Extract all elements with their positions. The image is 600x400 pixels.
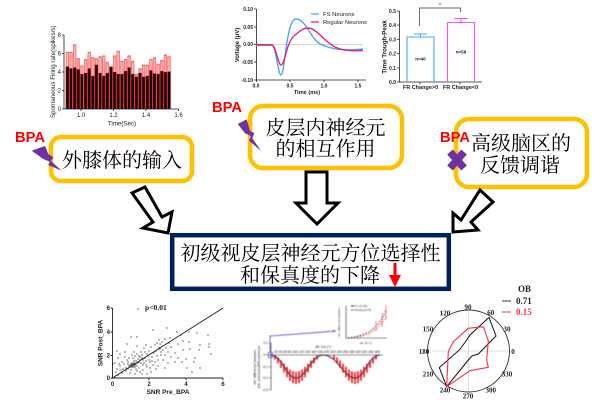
bar chart: spontaneous firing rate: 1.6 [174, 113, 183, 119]
inset chart: small orientation range: Pre/post FR [355, 308, 372, 312]
panel: intracortical interaction box [250, 106, 402, 168]
label: BPA right: BPA [440, 129, 470, 146]
inset chart: small orientation range: P (<0.05) [355, 304, 367, 308]
bar chart: time trough-peak: 0.4 [389, 23, 396, 29]
bar chart: time trough-peak: FR Change<0 [443, 85, 478, 91]
panel: intracortical interaction box: 皮层内神经元 [266, 116, 386, 140]
line chart: FS and regular neuron waveforms: Time (ms) [294, 90, 320, 96]
scatter plot: SNR pre vs post BPA: 6 [107, 306, 111, 312]
polar plot: orientation tuning: 90 [464, 304, 472, 312]
line chart: orientation difference with inset [253, 304, 387, 392]
line chart: orientation difference with inset: Ori. difference between [253, 349, 257, 384]
bar chart: spontaneous firing rate: 1.4 [142, 113, 151, 119]
label: BPA left: BPA [15, 129, 45, 146]
bar chart: time trough-peak: n=40 [415, 56, 426, 62]
scatter plot: SNR pre vs post BPA [98, 303, 225, 396]
scatter plot: SNR pre vs post BPA: SNR Post_BPA [98, 319, 104, 366]
legend: neuron types: FS Neurons [323, 12, 354, 18]
label: BPA center: BPA [212, 99, 242, 116]
bar chart: spontaneous firing rate: 1.2 [109, 113, 118, 119]
polar plot: orientation tuning: 120 [440, 310, 451, 318]
scatter plot: SNR pre vs post BPA: SNR Pre_BPA [147, 389, 190, 396]
inset chart: small orientation range: Ori. difference between [337, 307, 341, 336]
bar chart: spontaneous firing rate: Spontaneous Firing rate(spikes/s) [50, 25, 57, 118]
panel: intracortical interaction box: 的相互作用 [276, 138, 376, 160]
line chart: FS and regular neuron waveforms: -0.05 [242, 60, 253, 66]
icon: red down arrow [389, 263, 401, 287]
line chart: FS and regular neuron waveforms: 0.10 [243, 7, 253, 13]
inset chart: small orientation range [337, 304, 387, 345]
bar chart: time trough-peak: 0.2 [389, 52, 396, 58]
line chart: FS and regular neuron waveforms: 0.5 [287, 84, 294, 90]
bar chart: spontaneous firing rate: 1.0 [77, 113, 86, 119]
bar chart: time trough-peak: Time Trough-Peak [382, 20, 388, 74]
bar chart: spontaneous firing rate: 4 [58, 70, 62, 76]
scatter plot: SNR pre vs post BPA: 4 [107, 330, 111, 336]
polar plot: orientation tuning: 300 [485, 386, 496, 394]
line chart: orientation difference with inset: 20 40 60 80 100 120 140 160 180 200 220 240 260 280 300 320 340 360 [274, 350, 380, 354]
line chart: FS and regular neuron waveforms: -0.10 [242, 78, 253, 84]
line chart: orientation difference with inset: 0.0 [263, 353, 268, 357]
legend: neuron types [311, 12, 367, 26]
bar chart: time trough-peak: 0.3 [389, 38, 396, 44]
bar chart: time trough-peak: * [439, 3, 442, 9]
line chart: orientation difference with inset: -0.1 [262, 365, 268, 369]
bar chart: time trough-peak: n=58 [456, 50, 467, 54]
line chart: FS and regular neuron waveforms: 1.5 [355, 84, 362, 90]
polar plot: orientation tuning: 240 [440, 386, 451, 394]
polar plot: orientation tuning: 180 [419, 348, 430, 356]
bar chart: spontaneous firing rate: Time(Sec) [108, 120, 136, 128]
polar plot: orientation tuning: 30 [504, 326, 511, 334]
scatter plot: SNR pre vs post BPA: 6 [221, 382, 225, 388]
panel: LGN input box: 外膝体的输入 [62, 149, 182, 172]
polar plot: orientation tuning: 0 [511, 348, 515, 356]
legend: neuron types: Regular Neurons [323, 20, 367, 26]
line chart: orientation difference with inset: dK On (°) [315, 345, 332, 349]
line chart: FS and regular neuron waveforms: 1.0 [321, 84, 328, 90]
line chart: FS and regular neuron waveforms: Voltage (μV) [235, 28, 241, 62]
legend: OB values [502, 284, 532, 317]
bar chart: time trough-peak: 0.5 [389, 9, 396, 15]
panel: higher area feedback box: 反馈调谐 [480, 154, 560, 177]
polar plot: orientation tuning: 60 [487, 309, 495, 317]
bar chart: time trough-peak: 0.0 [389, 80, 396, 86]
scatter plot: SNR pre vs post BPA: 0 [111, 382, 115, 388]
line chart: orientation difference with inset: -0.3 [262, 388, 268, 392]
arrow: center box to result [296, 172, 338, 224]
legend: OB values: OB [518, 284, 531, 294]
callout: blue connector to inset [268, 330, 336, 358]
scatter plot: SNR pre vs post BPA: p<0.01 [145, 303, 167, 312]
bar chart: spontaneous firing rate: 0 [58, 107, 62, 113]
bar chart: time trough-peak: 0.1 [389, 66, 396, 72]
inset chart: small orientation range: dK On (°) [360, 341, 372, 345]
panel: LGN input box [51, 137, 192, 181]
polar plot: orientation tuning: 150 [423, 326, 434, 334]
panel: higher area feedback box: 高级脑区的 [471, 132, 571, 155]
bar chart: spontaneous firing rate: 6 [58, 52, 62, 58]
panel: higher area feedback box [456, 119, 587, 187]
line chart: orientation difference with inset: -0.2 [262, 376, 268, 380]
legend: OB values: 0.15 [516, 307, 532, 317]
icon: purple lightning bolt center [238, 119, 261, 151]
bar chart: spontaneous firing rate [50, 25, 183, 128]
line chart: orientation difference with inset: pre- and post-BPA exposure [257, 346, 261, 388]
polar plot: orientation tuning: 330 [502, 370, 513, 378]
line chart: FS and regular neuron waveforms: 0.0 [253, 84, 260, 90]
icon: purple cross blocking feedback [450, 152, 464, 168]
panel: conclusion box [172, 235, 449, 289]
bar chart: time trough-peak [382, 3, 482, 91]
panel: conclusion box: 和保真度的下降 [240, 264, 380, 287]
bar chart: spontaneous firing rate: 2 [58, 88, 62, 94]
polar plot: orientation tuning: 210 [423, 370, 434, 378]
line chart: orientation difference with inset: 0.1 [263, 341, 268, 345]
bar chart: time trough-peak: FR Change>0 [403, 85, 438, 91]
scatter plot: SNR pre vs post BPA: 2 [107, 354, 111, 360]
arrow: left box to result [132, 187, 172, 233]
legend: OB values: 0.71 [516, 296, 532, 306]
scatter plot: SNR pre vs post BPA: 0 [107, 376, 111, 382]
line chart: FS and regular neuron waveforms [235, 7, 367, 96]
icon: purple lightning bolt left [32, 146, 62, 171]
line chart: FS and regular neuron waveforms: 0.05 [243, 25, 253, 31]
polar plot: orientation tuning [419, 304, 515, 400]
scatter plot: SNR pre vs post BPA: 2 [147, 382, 151, 388]
scatter plot: SNR pre vs post BPA: 4 [184, 382, 188, 388]
arrow: right box to result [453, 190, 493, 232]
bar chart: spontaneous firing rate: 8 [58, 33, 62, 39]
line chart: FS and regular neuron waveforms: 0.00 [243, 42, 253, 48]
panel: conclusion box: 初级视皮层神经元方位选择性 [180, 242, 440, 265]
